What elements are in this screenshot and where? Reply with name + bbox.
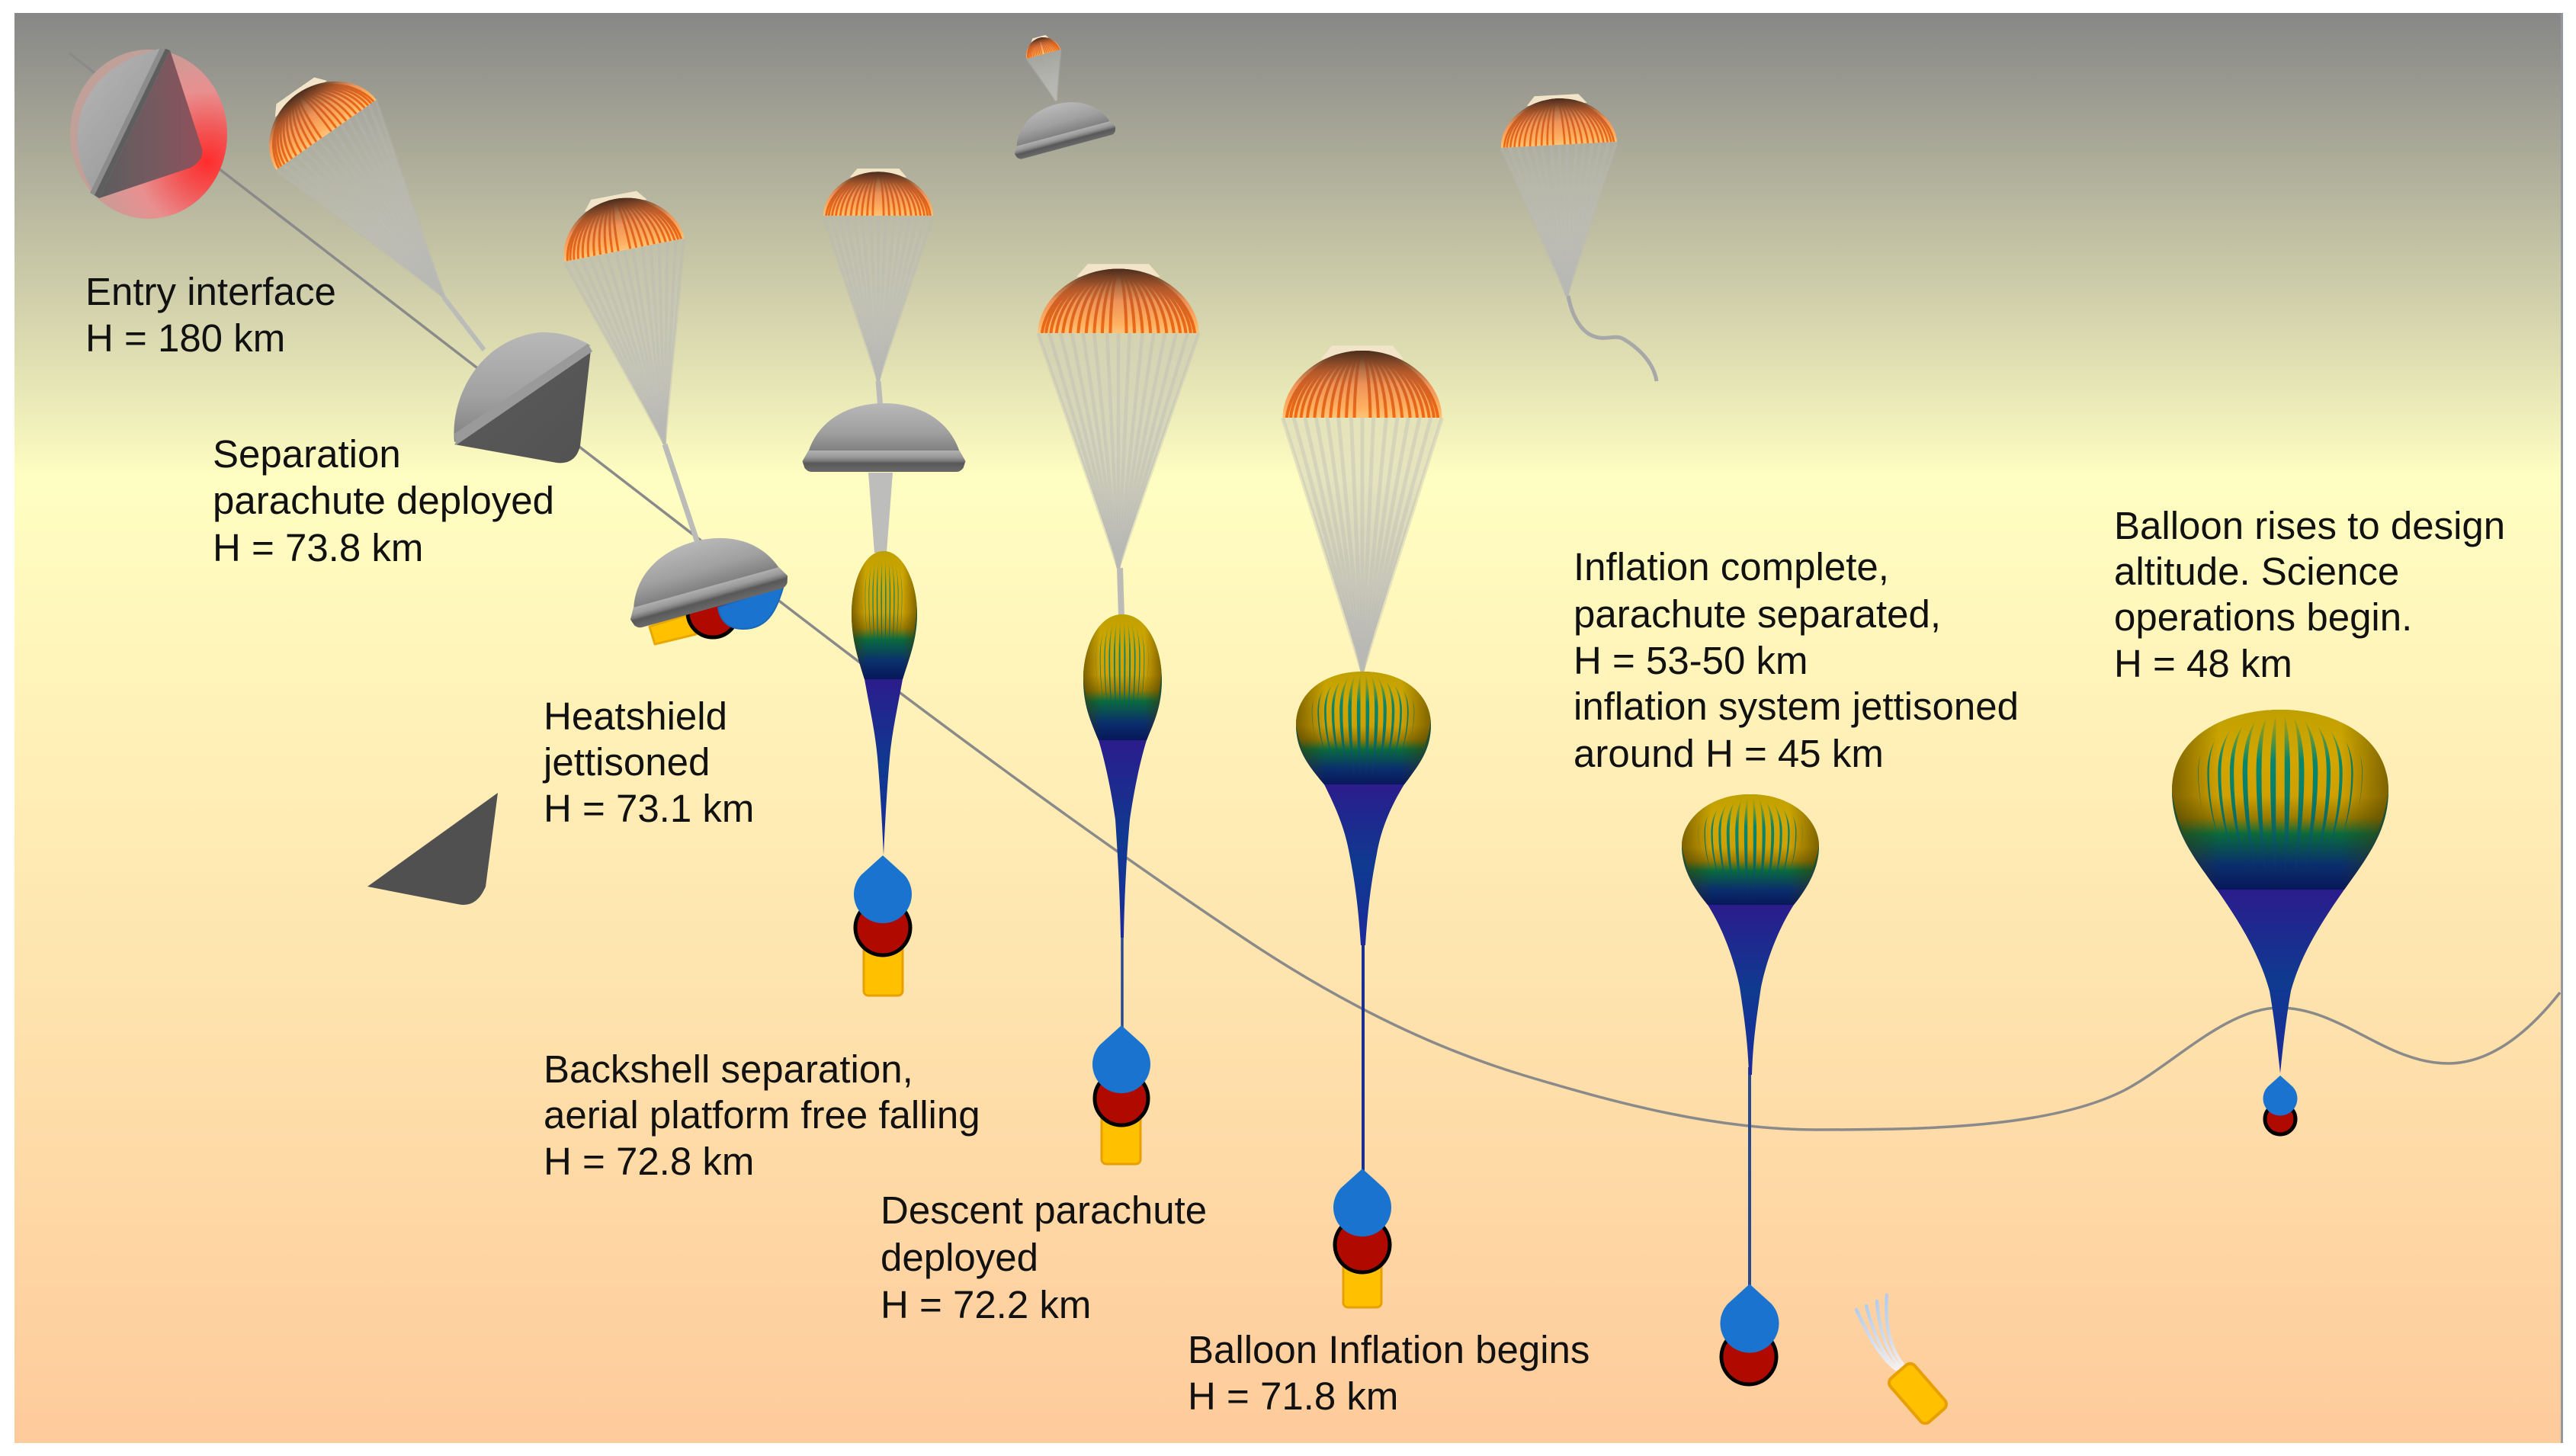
text: inflation complete: inflation system jettisoned — [1574, 685, 2019, 728]
text: descent parachute deployed: deployed — [881, 1236, 1038, 1279]
text: descent parachute deployed: Descent parachute — [881, 1188, 1207, 1232]
text: inflation complete: around H = 45 km — [1574, 732, 1884, 775]
text: entry interface: H = 180 km — [85, 316, 285, 360]
text: balloon rises to design altitude: H = 48 km — [2114, 642, 2292, 685]
stage: descent parachute deployed — [1038, 264, 1198, 1164]
inflation system jettisoned — [1856, 1295, 1949, 1426]
text: entry interface: Entry interface — [85, 270, 336, 313]
text: heatshield jettisoned: H = 73.1 km — [544, 787, 754, 830]
balloon 5 — [2172, 710, 2388, 1073]
tether — [1748, 1067, 1751, 1288]
parachute — [1282, 345, 1442, 672]
text: balloon inflation begins: H = 71.8 km — [1188, 1374, 1398, 1418]
balloon 2 — [1083, 614, 1162, 938]
text: balloon rises to design altitude: altitude. Science — [2114, 550, 2399, 593]
aerial platform — [1092, 1025, 1150, 1164]
text: separation parachute deployed: parachute deployed — [213, 479, 554, 522]
stage: balloon at design altitude — [2172, 710, 2388, 1134]
text: backshell separation: aerial platform free falling — [544, 1093, 980, 1137]
aerial platform — [2263, 1076, 2298, 1134]
parachute — [1038, 264, 1198, 616]
tether — [1121, 915, 1124, 1028]
aerial platform — [854, 855, 912, 996]
capsule: heatshield jettisoned, platform inside backshell — [615, 520, 791, 644]
text: inflation complete: H = 53-50 km — [1574, 639, 1808, 682]
balloon 4 — [1682, 794, 1819, 1075]
text: heatshield jettisoned: Heatshield — [544, 694, 727, 738]
shroud from backshell to balloon — [868, 473, 893, 553]
capsule: entry interface with heating glow — [70, 48, 227, 219]
parachute: pulling backshell — [554, 184, 724, 543]
heatshield falling away — [367, 793, 498, 905]
text: backshell separation: H = 72.8 km — [544, 1140, 754, 1183]
backshell — [802, 403, 965, 472]
parachute with free backshell at top — [1005, 32, 1117, 160]
stage: backshell separation, balloon stowed — [802, 168, 965, 996]
stage: balloon inflation begins — [1282, 345, 1442, 1307]
text: balloon inflation begins: Balloon Inflation begins — [1188, 1328, 1590, 1371]
parachute — [823, 168, 933, 408]
separated parachute with trailing tether — [1499, 92, 1657, 381]
text: descent parachute deployed: H = 72.2 km — [881, 1283, 1091, 1326]
text: separation parachute deployed: H = 73.8 km — [213, 526, 423, 569]
text: balloon rises to design altitude: Balloon rises to design — [2114, 504, 2505, 547]
aerial platform — [1333, 1169, 1391, 1307]
parachute: separation chute deploying — [245, 56, 493, 350]
text: heatshield jettisoned: jettisoned — [542, 740, 710, 784]
trajectory line — [69, 53, 2560, 1130]
text: balloon rises to design altitude: operations begin. — [2114, 595, 2412, 639]
text: inflation complete: Inflation complete, — [1574, 545, 1889, 588]
balloon 1 — [852, 551, 917, 855]
aerial platform without inflation system — [1720, 1284, 1779, 1384]
capsule: separation parachute deployed — [454, 332, 592, 463]
balloon 3 — [1296, 672, 1431, 945]
stage: inflation complete — [1682, 794, 1819, 1384]
text: backshell separation: Backshell separation, — [544, 1047, 913, 1091]
text: separation parachute deployed: Separation — [213, 432, 401, 476]
text: inflation complete: parachute separated, — [1574, 592, 1941, 636]
tether — [1362, 930, 1365, 1174]
